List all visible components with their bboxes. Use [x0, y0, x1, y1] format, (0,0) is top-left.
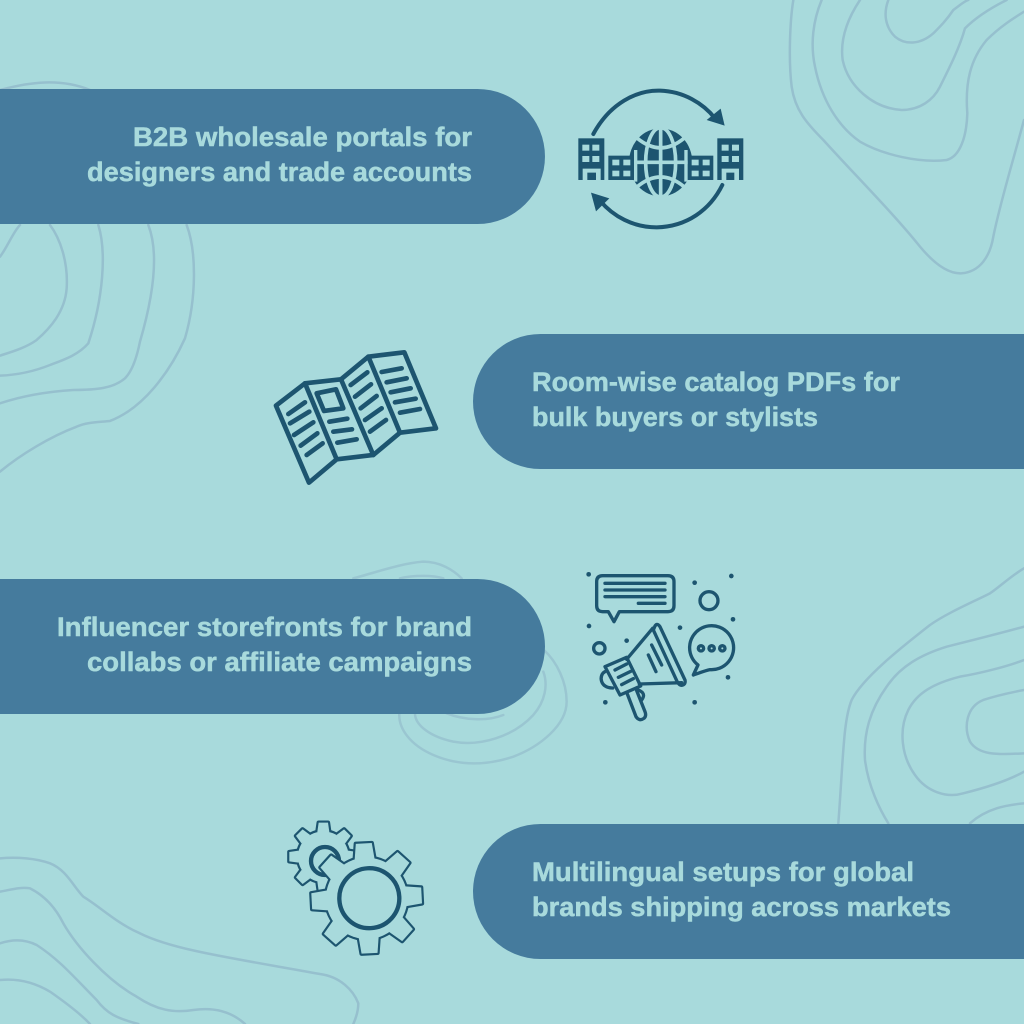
- panel: Room-wise catalog PDFs: [473, 334, 1024, 469]
- text: Influencer storefronts: collabs or affiliate campaigns: [87, 647, 472, 677]
- text: B2B wholesale portals: designers and trade accounts: [87, 157, 472, 187]
- icon: interlocking gears: [289, 823, 424, 956]
- icon: megaphone with speech bubbles: [586, 572, 735, 720]
- text: Multilingual setups: Multilingual setups for global: [532, 857, 914, 887]
- panel: Multilingual setups: [473, 824, 1024, 959]
- text: Room-wise catalog PDFs: [532, 367, 900, 432]
- text: Multilingual setups: [532, 857, 951, 922]
- text: Room-wise catalog PDFs: bulk buyers or stylists: [532, 402, 818, 432]
- panel: Influencer storefronts: [0, 579, 545, 714]
- text: Room-wise catalog PDFs: Room-wise catalog PDFs for: [532, 367, 900, 397]
- text: B2B wholesale portals: [87, 122, 472, 187]
- text: B2B wholesale portals: B2B wholesale portals for: [133, 122, 472, 152]
- text: Influencer storefronts: Influencer storefronts for brand: [57, 612, 472, 642]
- panel: B2B wholesale portals: [0, 89, 545, 224]
- text: Multilingual setups: brands shipping across markets: [532, 892, 951, 922]
- icon: folded catalog brochure: [276, 352, 436, 483]
- icon: globe between buildings with cycle arrows: [578, 91, 743, 227]
- text: Influencer storefronts: [57, 612, 472, 677]
